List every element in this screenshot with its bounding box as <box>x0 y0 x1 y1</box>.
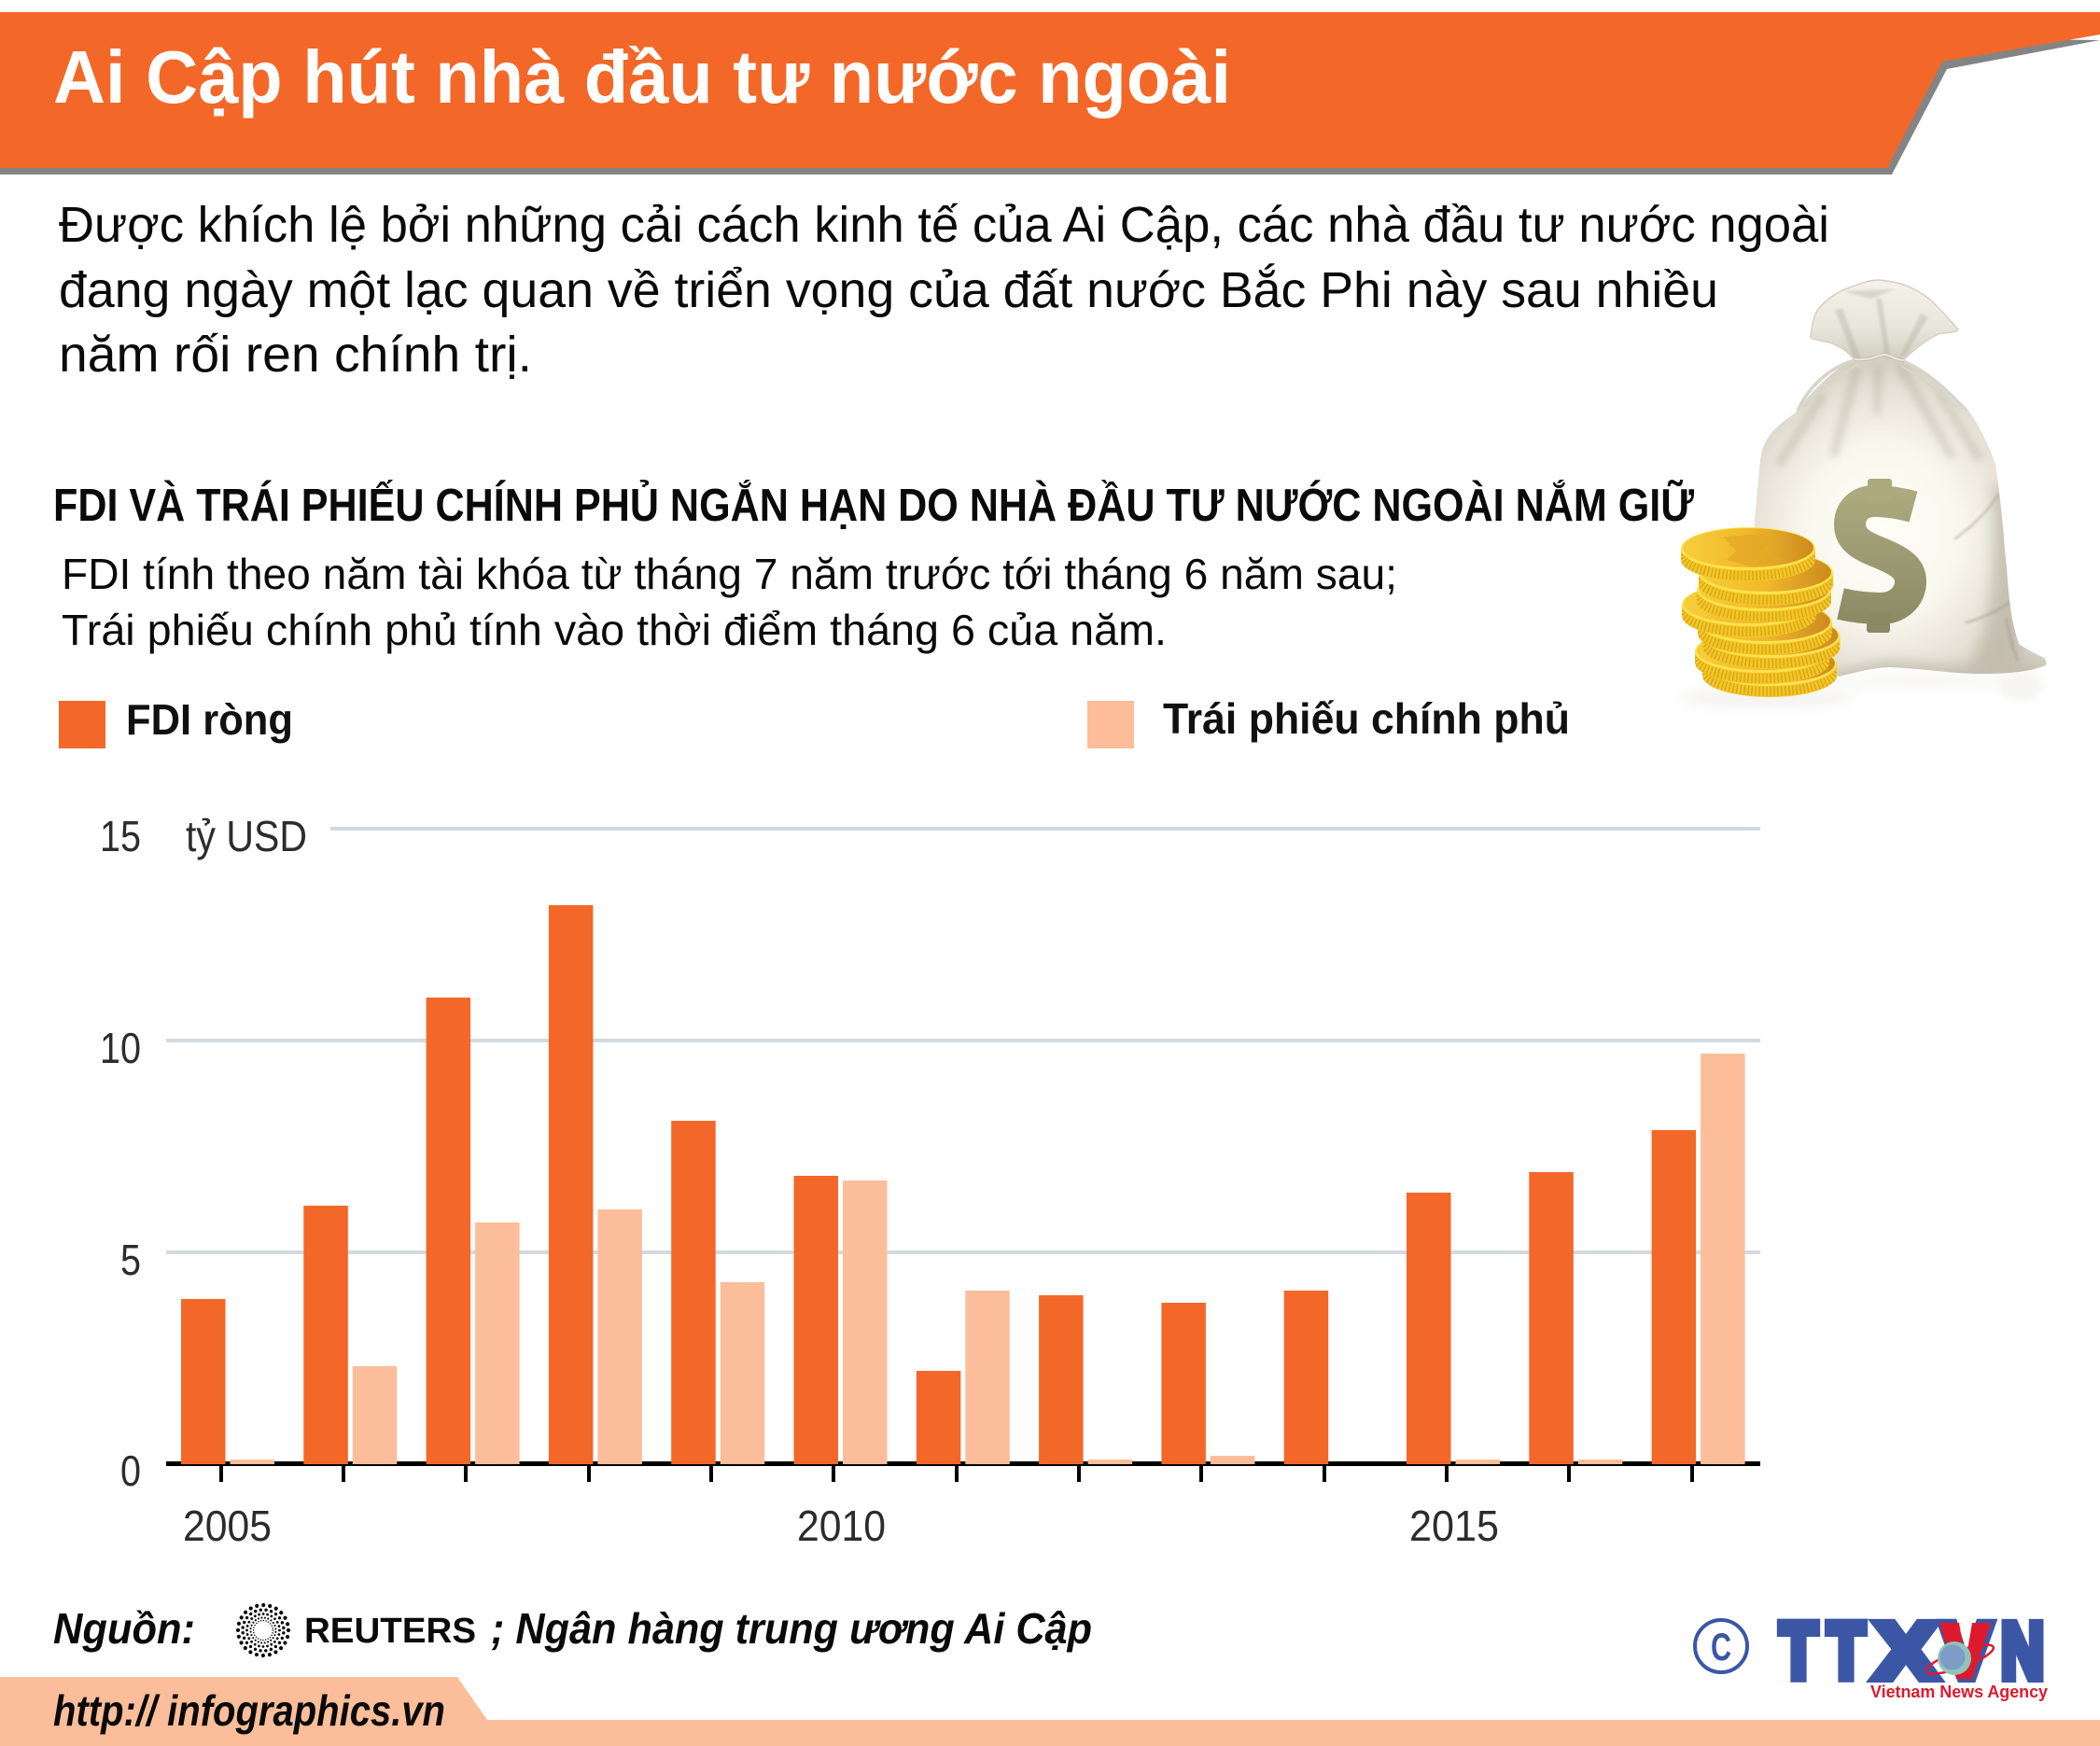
y axis labels: 15 <box>100 812 141 860</box>
source: Nguồn: <box>53 1604 195 1653</box>
x axis labels: 2005 <box>183 1502 272 1550</box>
x axis labels: 2015 <box>1409 1502 1499 1550</box>
unit label: tỷ USD <box>186 812 307 860</box>
logo: TTXVN: V <box>1941 1607 1992 1695</box>
logo: TTXVN: X <box>1875 1607 1937 1695</box>
icon: money bag <box>1755 280 2046 701</box>
source: ; Ngân hàng trung ương Ai Cập <box>491 1604 1092 1653</box>
footer url: http:// infographics.vn <box>53 1686 445 1735</box>
bag reflection <box>1820 671 2043 701</box>
x axis <box>166 1461 1760 1482</box>
intro text block: Được khích lệ bởi những cải cách kinh tế của Ai Cập, các nhà đầu tư nước ngoài <box>59 197 1829 253</box>
government bond bars <box>230 1054 1745 1464</box>
red V <box>1939 1623 1991 1679</box>
y axis labels: 10 <box>100 1024 141 1072</box>
y axis labels <box>100 812 141 1495</box>
logo: TTXVN <box>1780 1607 2048 1701</box>
intro text block: năm rối ren chính trị. <box>59 327 532 383</box>
legend: FDI ròng: FDI ròng <box>126 695 293 744</box>
bar chart <box>100 812 1760 1550</box>
x axis labels <box>183 1502 1499 1550</box>
chart note <box>62 550 1397 654</box>
chart heading: FDI VÀ TRÁI PHIẾU CHÍNH PHỦ NGẮN HẠN DO NHÀ ĐẦU TƯ NƯỚC NGOÀI NẮM GIỮ <box>53 480 1694 531</box>
legend: FDI ròng <box>59 695 293 748</box>
orbit <box>1924 1640 1996 1679</box>
intro text block <box>59 197 1829 383</box>
icon: Reuters logo <box>238 1605 288 1655</box>
icon: dollar sign <box>1841 479 1913 633</box>
bag folds <box>1775 366 2044 686</box>
chart note: Trái phiếu chính phủ tính vào thời điểm tháng 6 của năm. <box>62 606 1167 654</box>
source <box>53 1604 1092 1655</box>
FDI bars <box>181 905 1696 1464</box>
y axis labels: 5 <box>120 1236 141 1284</box>
logo: TTXVN: N <box>2001 1607 2044 1695</box>
bag knot <box>1811 280 1958 359</box>
bag body <box>1755 359 2046 677</box>
bag drawstring <box>1798 355 1964 411</box>
y axis grid <box>166 827 1760 1254</box>
logo: TTXVN: T <box>1780 1607 1817 1695</box>
legend: Trái phiếu chính phủ: Trái phiếu chính phủ <box>1163 694 1570 743</box>
globe <box>1938 1641 1971 1675</box>
source: REUTERS <box>304 1612 476 1651</box>
intro text block: đang ngày một lạc quan về triển vọng của đất nước Bắc Phi này sau nhiều <box>59 262 1718 318</box>
icon: copyright <box>1695 1620 1747 1672</box>
agency name: Vietnam News Agency <box>1870 1683 2048 1701</box>
logo: TTXVN: T <box>1827 1607 1865 1695</box>
title: Ai Cập hút nhà đầu tư nước ngoài <box>53 35 1231 119</box>
title banner <box>0 12 2100 175</box>
coin engraving <box>1723 534 1786 567</box>
footer band <box>0 1677 2100 1746</box>
chart note: FDI tính theo năm tài khóa từ tháng 7 năm trước tới tháng 6 năm sau; <box>62 550 1397 598</box>
icon: copyright: C <box>1711 1625 1731 1669</box>
y axis labels: 0 <box>120 1446 141 1495</box>
x axis labels: 2010 <box>797 1502 886 1550</box>
icon: gold coins <box>1678 527 1855 707</box>
